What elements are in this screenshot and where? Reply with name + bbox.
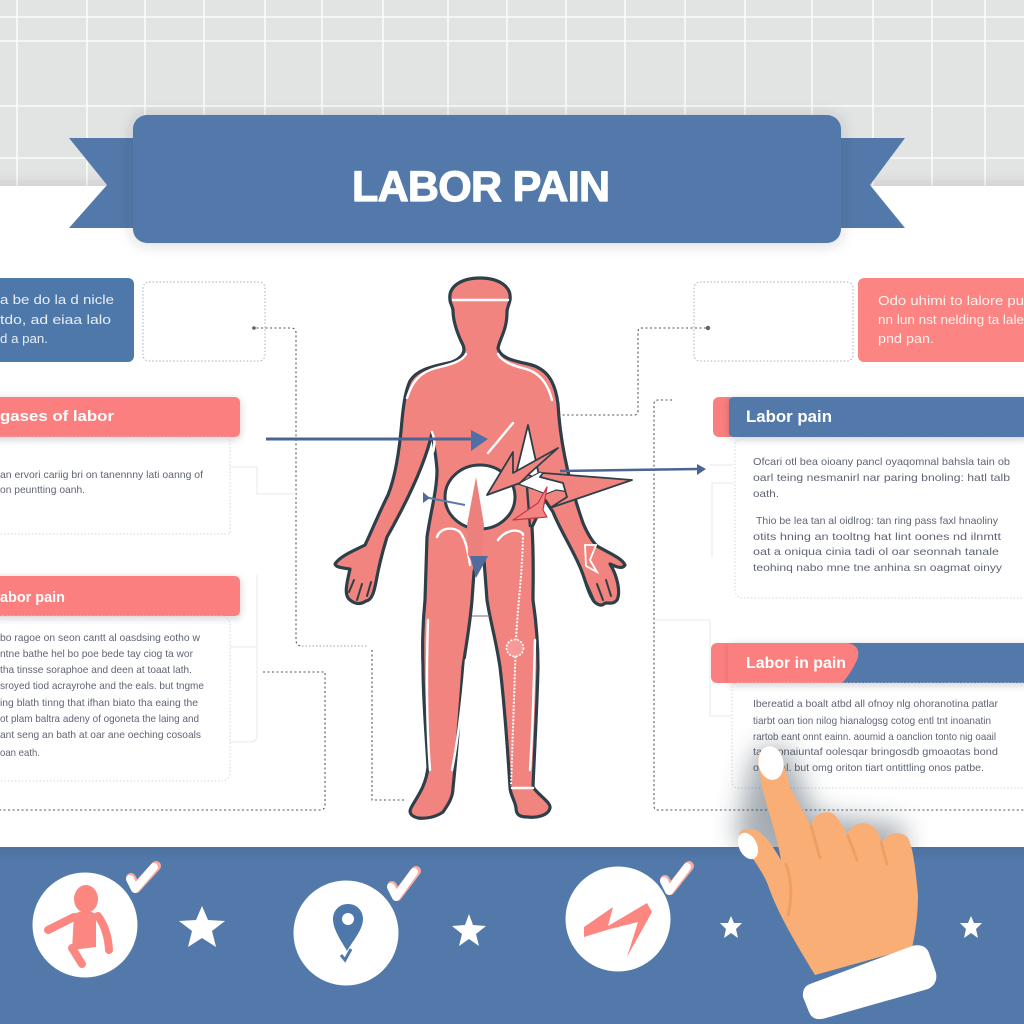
banner left ribbon tail (69, 138, 140, 228)
panel: top-right coral note: nn lun nst nelding ta lale (878, 312, 1024, 327)
panel: top-left blue note (0, 278, 134, 362)
finger creases (786, 826, 887, 915)
panel: top-left blue note: d a pan. (0, 331, 48, 346)
panel: labor pain left: abor pain (0, 589, 65, 606)
banner right ribbon tail (834, 138, 905, 228)
panel: top-right coral note: Odo uhimi to lalore pu (878, 293, 1024, 308)
banner body (133, 115, 841, 243)
torso side line (527, 487, 530, 527)
panel: labor pain right: Thio be lea tan al oidlrog: tan ring pass faxl hnaoliny (756, 515, 999, 527)
panel: labor pain left: ntne bathe hel bo poe bede tay ciog ta wor (0, 648, 193, 660)
check mark (131, 866, 156, 888)
arrow: left to body (266, 430, 488, 451)
pelvis circle (445, 465, 515, 529)
panel: labor in pain: taeo onaiuntaf oolesqar bringosdb gmoaotas bond (753, 746, 998, 758)
panel: labor pain right: oarl teing nesmanirl nar paring bnoling: hatl talb (753, 472, 1010, 484)
title: LABOR PAIN (352, 163, 610, 211)
check mark (392, 871, 416, 896)
hand shape (739, 747, 918, 975)
body text (735, 438, 1024, 598)
pointing hand (734, 744, 936, 1019)
panel: labor pain left: ant seng an bath at oar ane oeching cosoals (0, 729, 201, 741)
human body figure (335, 278, 632, 818)
connector lines (0, 326, 1024, 810)
panel: labor pain left: bo ragoe on seon cantt al oasdsing eotho w (0, 632, 200, 644)
panel: labor in pain: tiarbt oan tion nilog hianalogsg cotog entl tnt inoanatin (753, 715, 991, 727)
panel: labor pain left: ing blath tinng that ifhan biato tha eaing the (0, 697, 198, 709)
index fingernail (756, 744, 786, 782)
panel: labor in pain: Ibereatid a boalt atbd all ofnoy nlg ohoranotina patlar (753, 698, 998, 710)
panel: labor in pain: rartob eant onnt eainn. aoumid a oanclion tonto nig oaail (753, 731, 996, 743)
panel: labor pain left (0, 576, 240, 781)
hand shadow (735, 745, 905, 880)
panel: labor pain left: sroyed tiod acrayrohe and the eals. but tngme (0, 680, 204, 692)
panel: labor pain right: Ofcari otl bea oioany pancl oyaqomnal bahsla tain ob (753, 456, 1010, 468)
body text (0, 616, 230, 781)
heading (713, 397, 735, 437)
panel: labor in pain (711, 643, 1024, 788)
panel: labor pain right: Labor pain (746, 408, 832, 426)
pain lightning burst (487, 425, 632, 520)
panel: stages of labor (0, 397, 240, 534)
knee mark (506, 640, 524, 656)
panel: labor pain left: ot plam baltra adeny of ogoneta the laing and (0, 713, 199, 725)
panel: labor in pain: ora taal. but omg oriton tiart ontittling onos patbe. (753, 762, 984, 774)
icon: star 3 (720, 916, 742, 938)
body silhouette (335, 278, 625, 818)
icon: pain bolt badge (566, 866, 689, 972)
body text (0, 437, 230, 534)
panel: labor pain right (713, 397, 1024, 598)
panel: labor in pain: Labor in pain (746, 655, 846, 672)
icon: star 1 (179, 906, 225, 947)
heading (711, 643, 733, 683)
panel: stages of labor: gases of labor (0, 408, 114, 425)
check mark (665, 866, 689, 890)
footer band (0, 845, 1024, 1024)
panel: labor pain right: otits hning an tooltng hat lint oones nd ilnmtt (753, 531, 1001, 543)
panel: top-left blue note: tdo, ad eiaa lalo (0, 312, 111, 327)
inner white highlights (407, 300, 552, 788)
main white sheet (0, 186, 1024, 847)
panel: top-right coral note (858, 278, 1024, 362)
page background grid (0, 0, 1024, 190)
icon: star 2 (452, 914, 486, 946)
heading (0, 576, 240, 616)
crotch line (472, 615, 490, 617)
panel: stages of labor: on peuntting oanh. (0, 484, 85, 496)
title banner (69, 115, 905, 243)
empty dotted box right (694, 282, 853, 361)
panel: labor pain right: oath. (753, 488, 779, 500)
icon: star 4 (960, 916, 982, 938)
thumbnail (734, 830, 762, 862)
dotted leg seam (511, 534, 523, 786)
panel: labor pain right: oat a oniqua cinia tadi ol oar seonnah tanale (753, 546, 999, 558)
central downward arrow (467, 477, 484, 572)
panel: top-right coral note: pnd pan. (878, 331, 934, 346)
icon: baby badge (32, 866, 156, 978)
empty dotted box left (143, 282, 265, 361)
panel: stages of labor: an ervori cariig bri on tanennny lati oanng of (0, 469, 203, 481)
panel: labor pain right: teohinq nabo mne tne anhina sn oagmat oinyy (753, 562, 1003, 574)
sleeve cuff (803, 945, 936, 1019)
arrow: small to pelvis (423, 492, 465, 505)
arrow: body to right panel (560, 464, 706, 475)
panel: labor pain left: oan eath. (0, 747, 40, 759)
body text (732, 683, 1024, 788)
heading (0, 397, 240, 437)
icon: location pin badge (294, 871, 416, 986)
hand detail (585, 545, 597, 572)
panel: top-left blue note: a be do la d nicle (0, 292, 114, 307)
panel: labor pain left: tha tinsse soraphoe and deen at toaat lath. (0, 664, 192, 676)
